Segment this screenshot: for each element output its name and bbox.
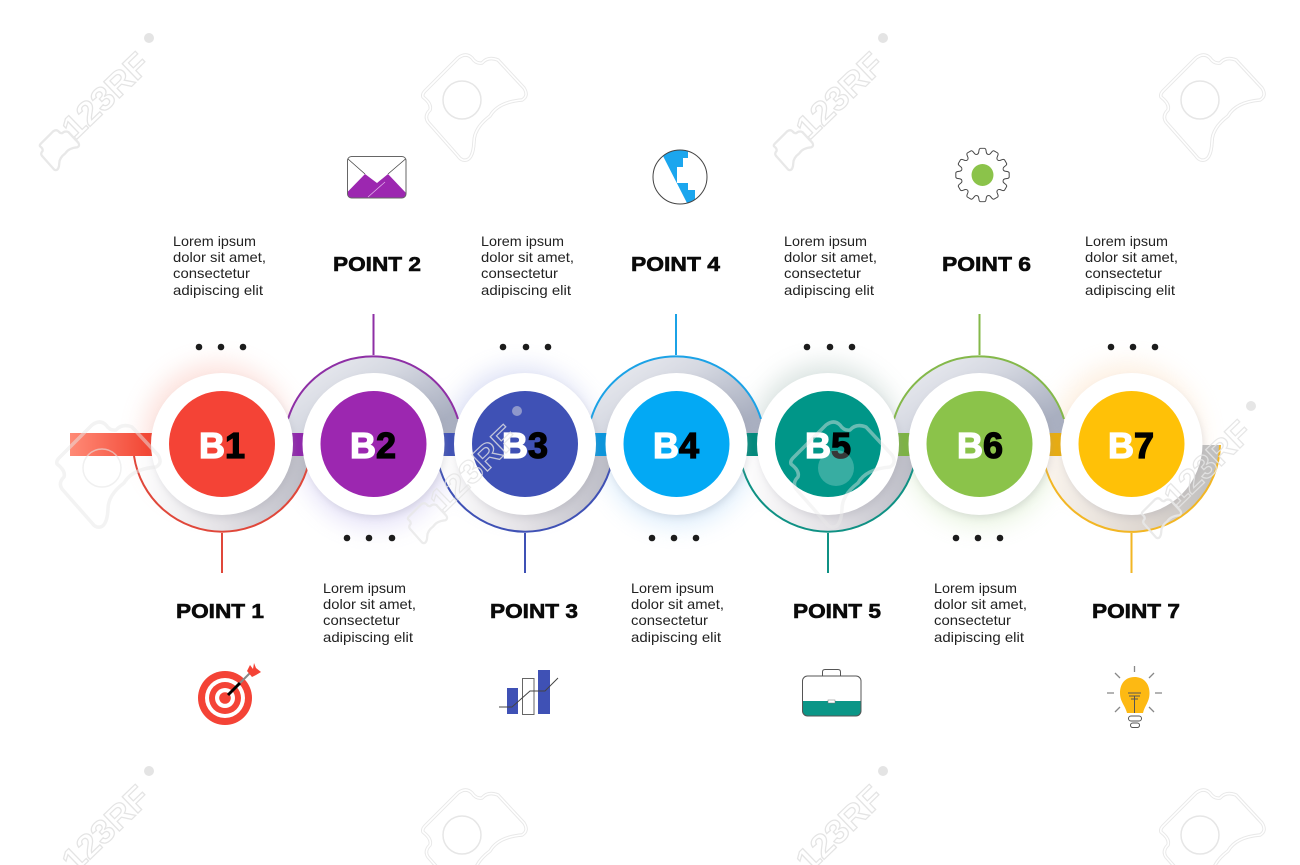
watermark: stock logo, top centre: 123RF (788, 45, 891, 146)
node B5 (757, 373, 899, 515)
heading: point 2: POINT 2 (333, 254, 421, 276)
node B7 (1060, 373, 1202, 515)
icon: compass globe (653, 150, 707, 204)
node B1: B1 (199, 425, 245, 466)
text block: point 6: adipiscing elit (934, 629, 1024, 645)
heading: point 6: POINT 6 (942, 254, 1031, 276)
text block: point 6: dolor sit amet, (934, 596, 1027, 612)
text block: point 7: consectetur (1085, 265, 1162, 281)
glows behind the circles (143, 363, 1201, 527)
text block: point 7: adipiscing elit (1085, 282, 1175, 298)
arcs and leader lines (134, 314, 1220, 573)
watermark: stock logo, middle right: 123RF (1156, 413, 1259, 514)
text block: point 3: Lorem ipsum (481, 233, 564, 249)
text block: point 1 (173, 233, 266, 298)
text block: point 4: Lorem ipsum (631, 580, 714, 596)
heading: point 7: POINT 7 (1092, 601, 1180, 623)
text block: point 5: Lorem ipsum (784, 233, 867, 249)
text block: point 7: dolor sit amet, (1085, 249, 1178, 265)
text block: point 6: consectetur (934, 612, 1011, 628)
node B3 (454, 373, 596, 515)
node B6 (908, 373, 1050, 515)
heading: point 3: POINT 3 (490, 601, 578, 623)
icon: gear (956, 148, 1009, 202)
watermark: stock logo, middle left: 123RF (422, 418, 525, 519)
text block: point 3: consectetur (481, 265, 558, 281)
text block: point 7: Lorem ipsum (1085, 233, 1168, 249)
text block: point 1: consectetur (173, 265, 250, 281)
text block: point 4: dolor sit amet, (631, 596, 724, 612)
text block: point 3: dolor sit amet, (481, 249, 574, 265)
icon: target with dart (198, 663, 261, 725)
text block: point 7 (1085, 233, 1178, 298)
text block: point 4 (631, 580, 724, 645)
soft shadows under white discs (154, 377, 1203, 518)
text block: point 4: consectetur (631, 612, 708, 628)
text block: point 2: dolor sit amet, (323, 596, 416, 612)
node B6: B6 (957, 425, 1003, 466)
heading: point 5: POINT 5 (793, 601, 881, 623)
arc shadow fills (134, 356, 1220, 532)
text block: point 1: dolor sit amet, (173, 249, 266, 265)
ellipsis dots (196, 344, 1158, 541)
icon: light bulb (1107, 666, 1162, 728)
text block: point 5: consectetur (784, 265, 861, 281)
node B1 (151, 373, 293, 515)
watermark: stock logo, top left: 123RF (54, 45, 157, 146)
text block: point 3: adipiscing elit (481, 282, 571, 298)
heading: point 1: POINT 1 (176, 601, 264, 623)
watermark: stock logo, middle left (408, 406, 525, 543)
watermark: stock logo, top centre (774, 33, 891, 170)
icon: envelope (348, 156, 406, 198)
node B4 (606, 373, 748, 515)
text block: point 2: consectetur (323, 612, 400, 628)
node B2: B2 (350, 425, 396, 466)
text block: point 2 (323, 580, 416, 645)
horizontal band (70, 433, 1070, 456)
heading: point 4: POINT 4 (631, 254, 721, 276)
text block: point 4: adipiscing elit (631, 629, 721, 645)
node B2 (302, 373, 444, 515)
text block: point 6: Lorem ipsum (934, 580, 1017, 596)
text block: point 5: adipiscing elit (784, 282, 874, 298)
text block: point 5: dolor sit amet, (784, 249, 877, 265)
watermark: stock logo, middle right (1142, 401, 1259, 538)
text block: point 1: Lorem ipsum (173, 233, 256, 249)
watermark: stock logo, top left (40, 33, 157, 170)
text block: point 2: Lorem ipsum (323, 580, 406, 596)
icon: bar chart (499, 670, 558, 714)
node B5: B5 (805, 425, 851, 466)
icon: briefcase (802, 670, 861, 716)
text block: point 6 (934, 580, 1027, 645)
node B4: B4 (653, 425, 699, 466)
node B3: B3 (502, 425, 548, 466)
text block: point 2: adipiscing elit (323, 629, 413, 645)
node B7: B7 (1108, 425, 1154, 466)
text block: point 5 (784, 233, 877, 298)
text block: point 3 (481, 233, 574, 298)
text block: point 1: adipiscing elit (173, 282, 263, 298)
